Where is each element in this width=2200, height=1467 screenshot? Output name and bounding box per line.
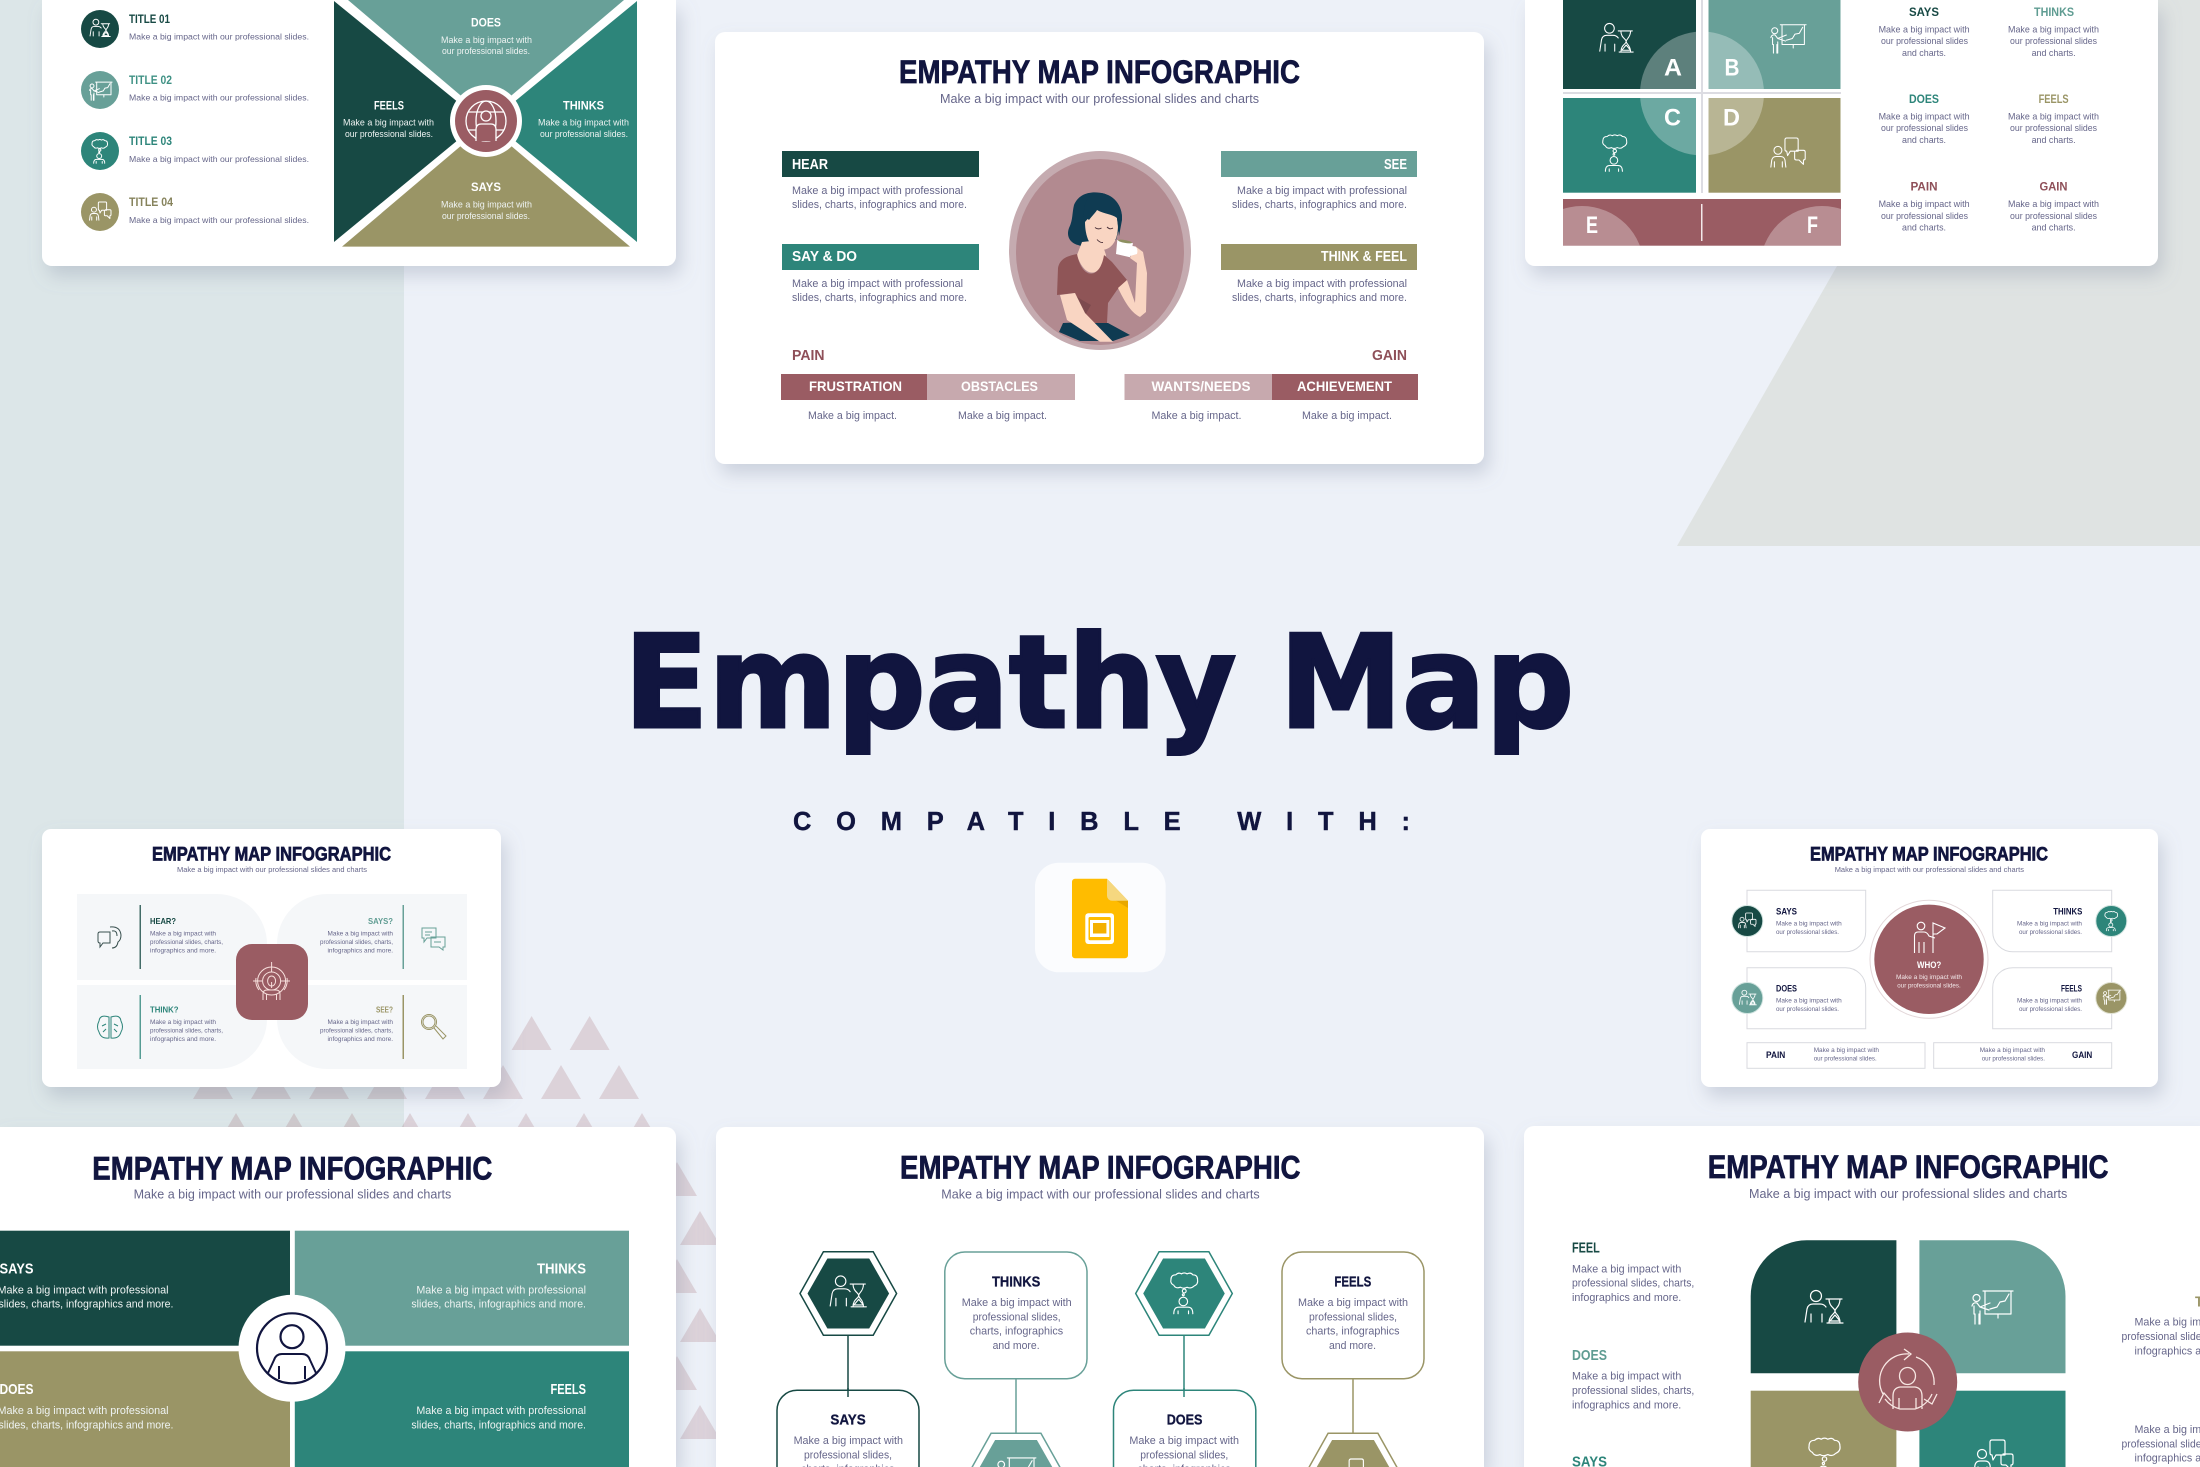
pain bar: obstacles: Make a big impact. — [958, 410, 1047, 422]
hexagon: sage with chart icon — [968, 1433, 1064, 1467]
box: feels — [1282, 1252, 1424, 1379]
text: gain: and charts. — [2032, 223, 2076, 233]
box: does: our professional slides. — [1776, 1006, 1839, 1013]
panel: think: infographics and more. — [150, 1036, 216, 1043]
quadrant: thinks: our professional slides. — [540, 129, 628, 139]
connectors — [848, 1333, 1353, 1436]
panel: think: professional slides, charts, — [150, 1028, 223, 1035]
box: thinks: our professional slides. — [2019, 929, 2082, 936]
subtitle: Make a big impact with our professional slides and charts — [177, 865, 367, 874]
hexagon: dark with hourglass icon — [800, 1252, 897, 1335]
heading: EMPATHY MAP INFOGRAPHIC — [1810, 845, 2048, 866]
panel: hear — [77, 894, 267, 980]
panel: think: THINK? — [150, 1005, 178, 1015]
block: see — [1221, 151, 1417, 211]
box: thinks: professional slides, — [973, 1311, 1061, 1323]
panel: see: SEE? — [376, 1005, 393, 1015]
panel: see: professional slides, charts, — [320, 1028, 393, 1035]
block: say and do — [782, 244, 979, 304]
panel: card bottom-center, hexagons and boxes — [716, 1127, 1484, 1467]
list item: title 04 — [81, 193, 309, 231]
list item: title 03: TITLE 03 — [129, 134, 172, 148]
box: feels: Make a big impact with — [1298, 1297, 1408, 1309]
letters A to F — [1586, 54, 1818, 239]
quadrant: teal with chat — [1919, 1391, 2066, 1467]
heading: EMPATHY MAP INFOGRAPHIC — [92, 1150, 492, 1186]
subtitle: Make a big impact with our professional slides and charts — [940, 92, 1259, 106]
box: feels: FEELS — [1334, 1274, 1371, 1291]
box: thinks: THINKS — [2053, 906, 2082, 917]
background shape: grey slanted block — [1677, 0, 2200, 546]
heading: EMPATHY MAP INFOGRAPHIC — [1708, 1149, 2108, 1185]
block: says: Make a big impact with professional — [0, 1284, 168, 1296]
letters A to F: A — [1664, 54, 1682, 82]
panel: hear: Make a big impact with — [150, 930, 216, 938]
subtitle: Make a big impact with our professional slides and charts — [941, 1188, 1260, 1202]
box: pain: PAIN — [1766, 1050, 1785, 1061]
block: hear: Make a big impact with professional — [792, 185, 963, 197]
text: pain: our professional slides — [1881, 211, 1968, 221]
list item: title 04: TITLE 04 — [129, 195, 173, 209]
block: say and do: SAY & DO — [792, 249, 857, 265]
block: say and do: slides, charts, infographics and more. — [792, 292, 967, 304]
quadrant: thinks: THINKS — [563, 98, 604, 112]
quadrant: says — [342, 125, 630, 247]
text: does: Make a big impact with — [1879, 112, 1970, 122]
hexagon: olive with chat icon — [1305, 1433, 1401, 1467]
block: hear: HEAR — [792, 157, 828, 173]
text: does — [1572, 1347, 1694, 1411]
letters A to F: C — [1664, 105, 1681, 132]
compatible with label: COMPATIBLE WITH: — [793, 808, 1410, 836]
box: pain: our professional slides. — [1814, 1056, 1877, 1063]
text: says: SAYS — [1909, 5, 1939, 19]
block: think and feel: THINK & FEEL — [1321, 249, 1407, 265]
background pattern: pink triangles — [193, 1016, 720, 1439]
gain bar: achievement — [1272, 374, 1418, 422]
text: second block, right column — [2122, 1424, 2200, 1465]
quadrant: does — [348, 0, 624, 117]
gain bar: wants and needs: Make a big impact. — [1152, 410, 1242, 422]
panel: hear: professional slides, charts, — [150, 939, 223, 946]
box: says: professional slides, — [804, 1449, 892, 1461]
panel: card mid-left, four questions around target — [42, 829, 501, 1087]
block: hear: slides, charts, infographics and more. — [792, 199, 967, 211]
panel: says: infographics and more. — [328, 948, 393, 954]
block: think and feel: Make a big impact with professional — [1237, 278, 1407, 290]
text: feels: Make a big impact with — [2008, 112, 2099, 122]
quadrant: feels: our professional slides. — [345, 129, 433, 139]
subtitle: Make a big impact with our professional slides and charts — [1835, 865, 2024, 874]
box: does — [1732, 968, 1866, 1029]
quadrant: does: Make a big impact with — [441, 35, 532, 45]
background band: left teal column — [0, 0, 404, 1467]
box: does: professional slides, — [1140, 1449, 1228, 1461]
block: think and feel — [1221, 244, 1417, 304]
box: feels: Make a big impact with — [2017, 998, 2082, 1005]
list item: title 02: TITLE 02 — [129, 73, 172, 87]
gain bar: achievement: ACHIEVEMENT — [1297, 378, 1392, 394]
quadrant: says: our professional slides. — [442, 211, 530, 221]
text: says — [1879, 5, 1970, 58]
block: does — [0, 1351, 290, 1467]
pain bar: obstacles — [927, 374, 1075, 422]
box: feels: charts, infographics — [1306, 1326, 1400, 1338]
panel: says: professional slides, charts, — [320, 939, 393, 946]
icon: globe with person — [450, 85, 522, 157]
heading: EMPATHY MAP INFOGRAPHIC — [899, 54, 1300, 90]
box: thinks: Make a big impact with — [962, 1297, 1072, 1309]
box: pain — [1747, 1043, 1925, 1068]
panel: card bottom-left, four rectangles with person — [0, 1127, 676, 1467]
block: does: DOES — [0, 1381, 34, 1398]
panel: see: infographics and more. — [328, 1036, 393, 1043]
box: does: Make a big impact with — [1776, 998, 1842, 1005]
list item: title 01: Make a big impact with our professional slides. — [129, 32, 309, 42]
box: does: DOES — [1167, 1412, 1202, 1429]
box: says: SAYS — [1776, 906, 1797, 917]
block: see: Make a big impact with professional — [1237, 185, 1407, 197]
pain bar: obstacles: OBSTACLES — [961, 378, 1038, 394]
box: does: Make a big impact with — [1129, 1435, 1239, 1447]
quadrant: A — [1563, 0, 1696, 89]
letters A to F: E — [1586, 212, 1598, 239]
subtitle: Make a big impact with our professional slides and charts — [134, 1188, 451, 1202]
letters A to F: D — [1723, 105, 1740, 132]
quadrant: thinks: Make a big impact with — [538, 118, 629, 128]
center circle: who: our professional slides. — [1897, 983, 1961, 990]
text: pain: Make a big impact with — [1879, 199, 1970, 209]
text: thinks: THINKS — [2034, 5, 2074, 19]
text: does: DOES — [1909, 92, 1939, 106]
box: does: DOES — [1776, 984, 1797, 995]
box: feels: professional slides, — [1309, 1311, 1397, 1323]
block: does: Make a big impact with professional — [0, 1405, 168, 1417]
letters A to F: B — [1724, 54, 1740, 82]
quadrant: olive with thought — [1751, 1391, 1896, 1467]
quadrant: feels: FEELS — [374, 98, 404, 112]
heading: EMPATHY MAP INFOGRAPHIC — [900, 1150, 1300, 1186]
block: see: SEE — [1384, 157, 1407, 173]
text: feel: professional slides, charts, — [1572, 1278, 1694, 1290]
text: feel: FEEL — [1572, 1240, 1600, 1257]
text: thinks: and charts. — [2032, 48, 2076, 58]
box: gain: our professional slides. — [1982, 1056, 2045, 1063]
panel: card top-center, empathy map with woman — [715, 32, 1484, 464]
hexagon: teal with thought icon — [1136, 1252, 1232, 1335]
subtitle: Make a big impact with our professional slides and charts — [1749, 1187, 2067, 1201]
block: feels: FEELS — [550, 1381, 586, 1398]
box: gain — [1934, 1043, 2112, 1068]
text: feels — [2008, 92, 2099, 145]
heading: EMPATHY MAP INFOGRAPHIC — [152, 845, 391, 866]
list item: title 03: Make a big impact with our professional slides. — [129, 154, 309, 164]
panel: says: SAYS? — [368, 916, 393, 926]
panel: card mid-right, who and four boxes — [1701, 829, 2158, 1087]
text: gain: GAIN — [2040, 180, 2068, 194]
pain bar: frustration: FRUSTRATION — [809, 378, 902, 394]
box: says: our professional slides. — [1776, 929, 1839, 936]
center badge: person with cycle arrows — [1858, 1332, 1957, 1432]
box: says: SAYS — [830, 1412, 866, 1429]
list item: title 03 — [81, 132, 309, 170]
quadrant: feels: Make a big impact with — [343, 118, 434, 128]
gain bar: wants and needs: WANTS/NEEDS — [1152, 378, 1250, 394]
list item: title 01: TITLE 01 — [129, 12, 170, 26]
text: does: professional slides, charts, — [1572, 1385, 1694, 1397]
box: thinks — [1993, 890, 2127, 952]
list item: title 01 — [81, 10, 309, 48]
gain bar: achievement: Make a big impact. — [1302, 410, 1392, 422]
quadrant: dark with hourglass — [1751, 1240, 1896, 1373]
box: thinks: THINKS — [992, 1274, 1040, 1291]
quadrant: says: SAYS — [471, 180, 501, 194]
icon: Google Slides file — [1035, 863, 1166, 972]
box: does — [1114, 1388, 1256, 1467]
text: pain: and charts. — [1902, 223, 1946, 233]
text: gain: Make a big impact with — [2008, 199, 2099, 209]
text: feel: infographics and more. — [1572, 1292, 1681, 1304]
block: feels: Make a big impact with professional — [416, 1405, 586, 1417]
panel: think: Make a big impact with — [150, 1019, 216, 1026]
panel: says: Make a big impact with — [328, 930, 393, 938]
center circle: who — [1870, 900, 1988, 1018]
quadrant: does: our professional slides. — [442, 46, 530, 56]
box: says: Make a big impact with — [1776, 920, 1842, 927]
text: thinks: Make a big impact with — [2008, 24, 2099, 34]
box: thinks: Make a big impact with — [2017, 920, 2082, 927]
quadrant: feels — [334, 1, 481, 242]
panel: card top-right, lettered quadrants — [1524, 0, 2168, 282]
block: thinks: slides, charts, infographics and more. — [411, 1299, 586, 1311]
list item: title 02 — [81, 71, 309, 109]
list item: title 02: Make a big impact with our professional slides. — [129, 92, 309, 102]
text: pain: PAIN — [1910, 180, 1938, 194]
block: feels — [295, 1351, 629, 1467]
box: thinks: charts, infographics — [970, 1326, 1064, 1338]
block: thinks: THINKS — [537, 1260, 586, 1277]
quadrant: sage with chart — [1919, 1240, 2066, 1373]
text: says: our professional slides — [1881, 36, 1968, 46]
overlay circle across quadrants — [1640, 32, 1764, 156]
text: does: our professional slides — [1881, 123, 1968, 133]
panel: see: Make a big impact with — [328, 1019, 393, 1026]
box: thinks — [945, 1252, 1087, 1379]
main title: Empathy Map — [624, 609, 1574, 758]
text: says: and charts. — [1902, 48, 1946, 58]
panel: hear: infographics and more. — [150, 948, 216, 954]
text: feels: FEELS — [2039, 92, 2069, 106]
box: feels: and more. — [1329, 1340, 1376, 1352]
illustration: woman drinking from cup in oval — [1009, 151, 1191, 350]
letters A to F: F — [1807, 212, 1818, 239]
block: says — [0, 1231, 290, 1346]
quadrant: B — [1708, 0, 1840, 89]
block: says: slides, charts, infographics and more. — [0, 1299, 174, 1311]
block: feels: slides, charts, infographics and more. — [411, 1419, 586, 1431]
box: thinks: and more. — [993, 1340, 1040, 1352]
panel: card top-left, four triangle quadrants — [42, 0, 676, 266]
block: thinks: Make a big impact with professional — [416, 1284, 586, 1296]
box: says: Make a big impact with — [794, 1435, 903, 1447]
pain bar: frustration: Make a big impact. — [808, 410, 897, 422]
center circle: who: Make a big impact with — [1896, 974, 1962, 981]
block: does: slides, charts, infographics and more. — [0, 1419, 174, 1431]
block: say and do: Make a big impact with professional — [792, 278, 963, 290]
text: does: DOES — [1572, 1347, 1607, 1364]
icon: person in circle — [238, 1295, 346, 1402]
quadrant: does: DOES — [471, 16, 501, 30]
quadrant: thinks — [491, 1, 637, 242]
block: hear — [782, 151, 979, 211]
text: thinks — [2008, 5, 2099, 58]
text: pain — [1879, 180, 1970, 233]
box: gain: Make a big impact with — [1980, 1047, 2045, 1054]
text: feel — [1572, 1240, 1694, 1304]
box: feels — [1993, 968, 2127, 1029]
panel: see — [277, 985, 467, 1069]
bar: E and F — [1563, 199, 1841, 246]
text: says: Make a big impact with — [1879, 24, 1970, 34]
gain bar: wants and needs — [1124, 374, 1272, 422]
panel: hear: HEAR? — [150, 916, 176, 926]
label: pain: PAIN — [792, 348, 824, 364]
block: think and feel: slides, charts, infographics and more. — [1232, 292, 1407, 304]
quadrant: says: Make a big impact with — [441, 200, 532, 210]
text: does: infographics and more. — [1572, 1399, 1681, 1411]
box: pain: Make a big impact with — [1814, 1047, 1879, 1054]
quadrant: C — [1563, 98, 1696, 193]
panel: says — [277, 894, 467, 980]
text: feels: and charts. — [2032, 135, 2076, 145]
box: says — [777, 1388, 919, 1467]
panel: think — [77, 985, 267, 1069]
center circle: who: WHO? — [1917, 960, 1941, 971]
box: feels: FEELS — [2061, 984, 2082, 995]
pain bar: frustration — [781, 374, 927, 422]
box: gain: GAIN — [2072, 1050, 2092, 1061]
quadrant: D — [1708, 98, 1840, 193]
text: thinks, right column — [2122, 1294, 2200, 1357]
text: gain: our professional slides — [2010, 211, 2097, 221]
block: thinks — [295, 1231, 629, 1346]
list item: title 04: Make a big impact with our professional slides. — [129, 215, 309, 225]
block: says: SAYS — [0, 1260, 34, 1277]
text: does: Make a big impact with — [1572, 1371, 1681, 1383]
text: does — [1879, 92, 1970, 145]
label: gain: GAIN — [1372, 348, 1407, 364]
text: thinks: our professional slides — [2010, 36, 2097, 46]
panel: card bottom-right, rounded quadrants — [1524, 1126, 2200, 1467]
text: feel: Make a big impact with — [1572, 1263, 1681, 1275]
text: does: and charts. — [1902, 135, 1946, 145]
center badge: target person — [236, 944, 308, 1020]
box: feels: our professional slides. — [2019, 1006, 2082, 1013]
text: gain — [2008, 180, 2099, 233]
box: says — [1732, 890, 1866, 952]
text: feels: our professional slides — [2010, 123, 2097, 133]
block: see: slides, charts, infographics and more. — [1232, 199, 1407, 211]
